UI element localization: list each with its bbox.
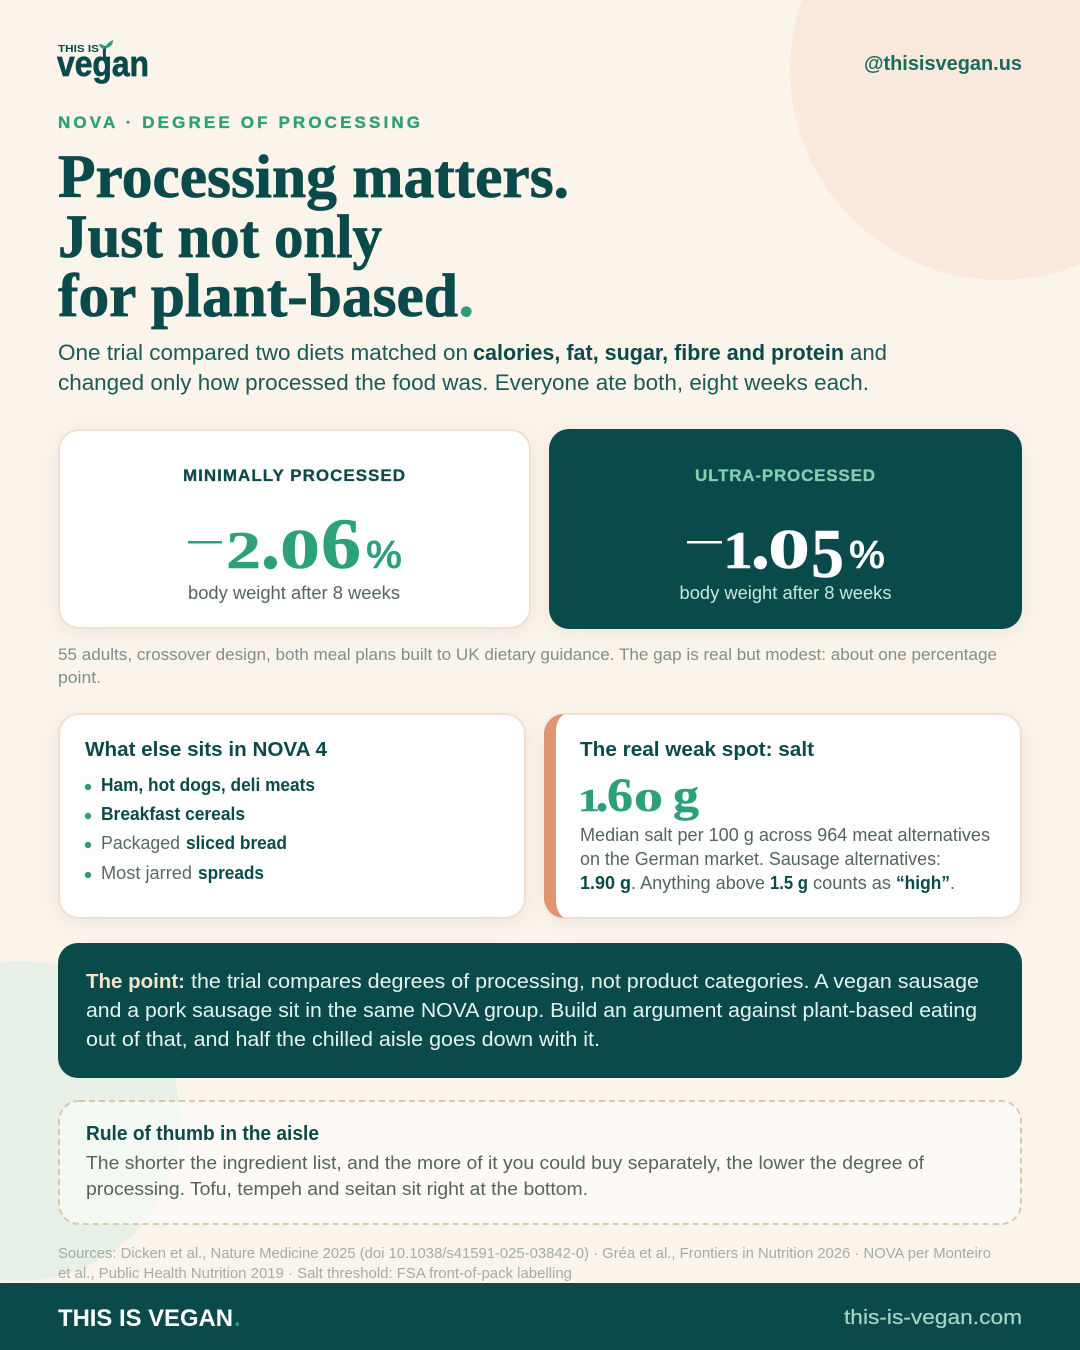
panel: minimally processed xyxy=(59,430,530,628)
sources xyxy=(58,1246,991,1282)
accent bar xyxy=(544,714,564,918)
study note xyxy=(58,646,997,687)
description: . Anything above xyxy=(631,873,765,893)
label: minimally processed: MINIMALLY PROCESSED xyxy=(183,466,405,485)
body: processing. Tofu, tempeh and seitan sit right at the bottom. xyxy=(86,1178,588,1199)
description xyxy=(580,825,990,893)
caption: body weight after 8 weeks xyxy=(188,583,400,603)
panel: the real weak spot, salt xyxy=(544,714,1021,918)
intro text: and xyxy=(850,340,887,365)
callout: the point: The point: xyxy=(86,970,185,993)
stat: 1.60 g: 0 xyxy=(634,782,663,818)
panel: what else sits in NOVA 4 xyxy=(59,714,525,918)
callout: the point: and a pork sausage sit in the same NOVA group. Build an argument against plant-based eating xyxy=(86,999,977,1022)
decorative green circle xyxy=(0,961,180,1281)
list: spreads xyxy=(198,863,264,883)
stat: -2.06%: . xyxy=(261,498,280,585)
footer brand: . xyxy=(234,1305,241,1332)
list: Most jarred xyxy=(101,863,192,883)
description: . xyxy=(950,873,955,893)
callout: the point: out of that, and half the chilled aisle goes down with it. xyxy=(86,1028,600,1051)
stat: -1.05%: . xyxy=(751,498,770,585)
study note: 55 adults, crossover design, both meal plans built to UK dietary guidance. The gap is real but modest: about one percentage xyxy=(58,646,997,664)
stat: -2.06%: 0 xyxy=(280,519,320,581)
intro text: changed only how processed the food was. Everyone ate both, eight weeks each. xyxy=(58,370,869,395)
intro text: One trial compared two diets matched on xyxy=(58,340,468,365)
eyebrow: NOVA · DEGREE OF PROCESSING xyxy=(58,113,420,132)
stat: -2.06% xyxy=(188,498,402,585)
list: sliced bread xyxy=(186,833,287,853)
intro text xyxy=(58,340,887,395)
body: The shorter the ingredient list, and the more of it you could buy separately, the lower the degree of xyxy=(86,1152,925,1173)
list: Ham, hot dogs, deli meats xyxy=(101,775,315,795)
stat: -1.05%: % xyxy=(849,533,885,577)
description: 1.5 g xyxy=(770,873,808,893)
stat: 1.60 g: 6 xyxy=(607,769,633,822)
heading: The real weak spot: salt xyxy=(580,738,814,761)
title: for plant-based xyxy=(58,263,458,330)
callout: the point: the trial compares degrees of processing, not product categories. A vegan sausage xyxy=(191,970,979,993)
study note: point. xyxy=(58,669,101,687)
stat: -2.06%: % xyxy=(366,533,402,577)
logo: this is vegan: THIS IS xyxy=(58,43,99,55)
stat: -1.05%: 0 xyxy=(768,519,810,581)
footer url: this-is-vegan.com xyxy=(844,1306,1022,1329)
callout: the point xyxy=(58,943,1022,1078)
title: Processing matters. xyxy=(58,144,569,211)
title: . xyxy=(458,258,474,331)
body xyxy=(86,1152,925,1199)
sources: et al., Public Health Nutrition 2019 · Salt threshold: FSA front-of-pack labelling xyxy=(58,1266,572,1282)
intro text: calories, fat, sugar, fibre and protein xyxy=(473,340,844,365)
label: ultra-processed: ULTRA-PROCESSED xyxy=(695,466,875,485)
decorative peach circle xyxy=(790,0,1080,280)
stat: -2.06%: 2 xyxy=(226,522,261,580)
stat: 1.60 g: . xyxy=(596,766,608,823)
list xyxy=(85,775,315,883)
stat: 1.60 g xyxy=(578,766,700,823)
title xyxy=(58,144,569,331)
heading: Rule of thumb in the aisle xyxy=(86,1123,319,1145)
sources: Sources: Dicken et al., Nature Medicine 2025 (doi 10.1038/s41591-025-03842-0) · Gréa et al., Frontiers in Nutrition 2026 · NOVA per Monteiro xyxy=(58,1246,991,1262)
caption: body weight after 8 weeks xyxy=(680,583,892,603)
list: Breakfast cereals xyxy=(101,804,245,824)
description: on the German market. Sausage alternatives: xyxy=(580,849,941,869)
title: Just not only xyxy=(58,204,382,271)
description: 1.90 g xyxy=(580,873,631,893)
stat: -1.05%: 1 xyxy=(723,522,753,580)
heading: What else sits in NOVA 4 xyxy=(85,738,328,761)
stat: 1.60 g: g xyxy=(673,771,700,821)
stat: -1.05%: 5 xyxy=(811,516,844,593)
stat: -2.06%: 6 xyxy=(321,504,361,584)
logo: this is vegan: vegan xyxy=(57,43,149,84)
list: Packaged xyxy=(101,833,180,853)
panel: ultra-processed xyxy=(549,429,1022,629)
stat: 1.60 g: 1 xyxy=(578,782,600,818)
description: “high” xyxy=(896,873,950,893)
panel: rule of thumb xyxy=(59,1101,1021,1224)
description: Median salt per 100 g across 964 meat alternatives xyxy=(580,825,990,845)
stat: -1.05% xyxy=(687,498,885,593)
description: counts as xyxy=(813,873,891,893)
footer brand: THIS IS VEGAN xyxy=(58,1305,233,1332)
handle: @thisisvegan.us xyxy=(864,53,1022,75)
footer xyxy=(0,1283,1080,1350)
